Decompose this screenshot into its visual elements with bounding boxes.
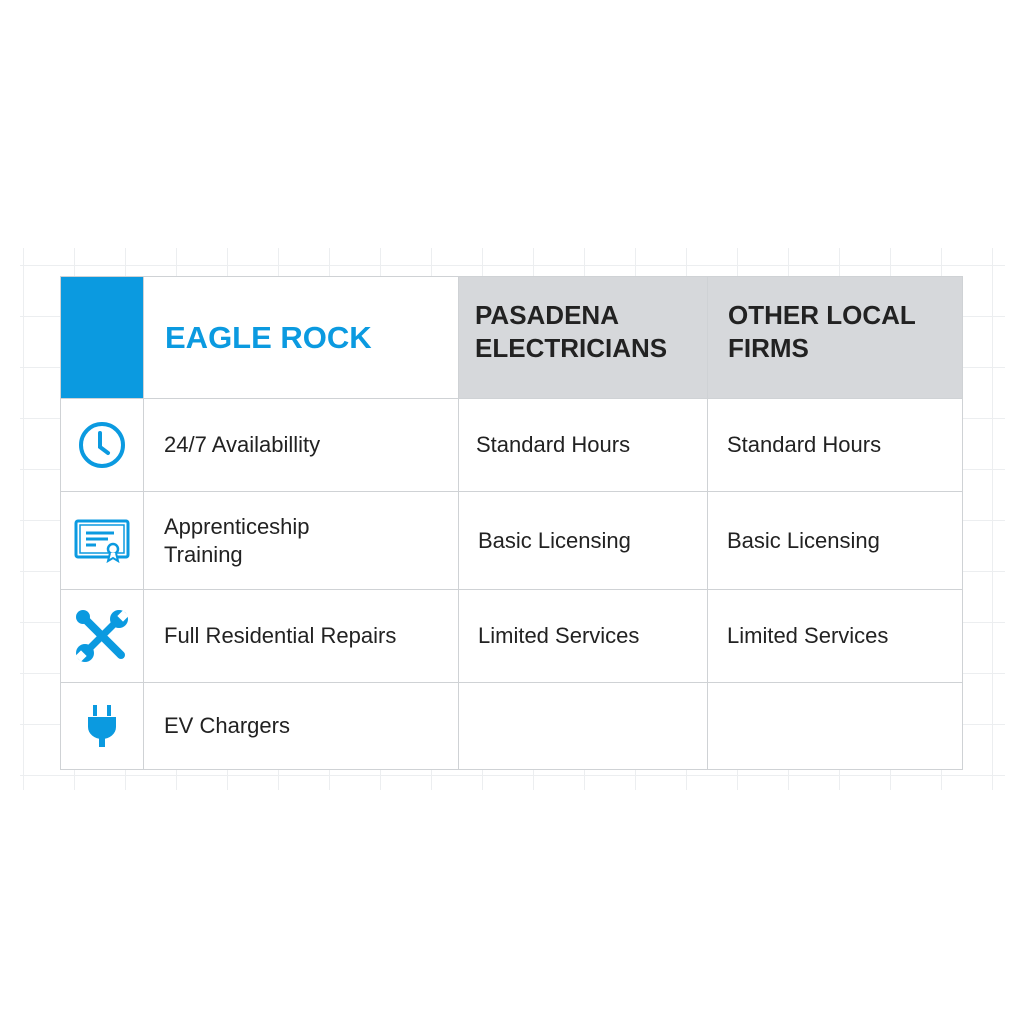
row 1 other	[707, 398, 963, 492]
icon: certificate	[60, 491, 144, 590]
row 2 other	[707, 491, 963, 590]
row 3 other: Limited Services	[727, 623, 888, 648]
row 2 pasadena: Basic Licensing	[478, 528, 631, 552]
row 2 other: Basic Licensing	[727, 528, 880, 552]
row 2 pasadena	[458, 491, 708, 590]
header: Other local firms	[707, 276, 963, 399]
row 3 other	[707, 589, 963, 683]
row 2: apprenticeship	[143, 491, 459, 590]
row 1 other: Standard Hours	[727, 432, 881, 457]
icon: tools	[60, 589, 144, 683]
header: Other local firms: FIRMS	[728, 333, 809, 363]
header: Pasadena Electricians: PASADENA	[475, 300, 619, 330]
icon: clock	[60, 398, 144, 492]
row 2: apprenticeship: Apprenticeship	[164, 514, 310, 538]
row 4: EV chargers	[143, 682, 459, 770]
row 3 pasadena	[458, 589, 708, 683]
icon: plug	[60, 682, 144, 770]
row 1 pasadena	[458, 398, 708, 492]
header: Eagle Rock: EAGLE ROCK	[165, 320, 372, 355]
row 3 pasadena: Limited Services	[478, 623, 639, 648]
header: Other local firms: OTHER LOCAL	[728, 300, 916, 330]
row 1: 24/7 availability	[143, 398, 459, 492]
header: Pasadena Electricians	[458, 276, 708, 399]
row 1: 24/7 availability: 24/7 Availabillity	[164, 432, 320, 457]
row 3: full residential repairs	[143, 589, 459, 683]
row 2: apprenticeship: Training	[164, 542, 243, 566]
header: Eagle Rock	[143, 276, 459, 399]
row 4 other empty	[707, 682, 963, 770]
row 3: full residential repairs: Full Residential Repairs	[164, 623, 396, 648]
row 4: EV chargers: EV Chargers	[164, 713, 290, 738]
header: Pasadena Electricians: ELECTRICIANS	[475, 333, 667, 363]
row 4 pasadena empty	[458, 682, 708, 770]
row 1 pasadena: Standard Hours	[476, 432, 630, 457]
header: blue corner	[60, 276, 144, 399]
